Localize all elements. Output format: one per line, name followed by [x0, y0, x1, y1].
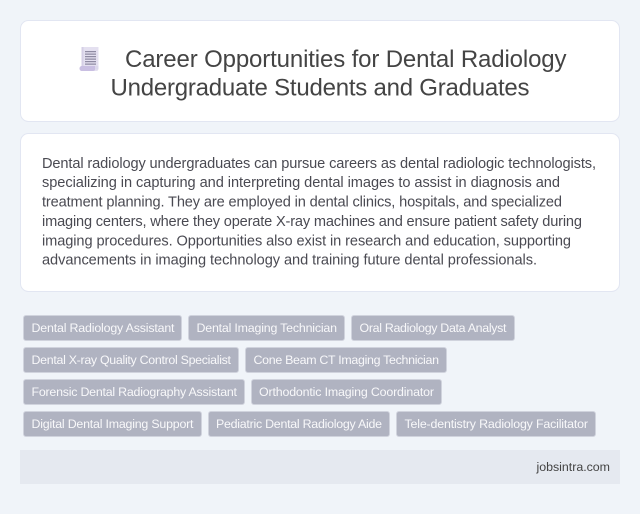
title: Undergraduate Students and Graduates — [110, 74, 530, 102]
panel: description — [20, 134, 620, 292]
panel: header — [20, 20, 620, 122]
tag: Orthodontic Imaging Coordinator — [252, 380, 442, 404]
description text: imaging centers, where they operate X-ray machines and ensure patient safety during — [42, 214, 582, 230]
footer source text: jobsintra.com — [536, 460, 610, 474]
tag: Tele-dentistry Radiology Facilitator — [396, 412, 596, 436]
tag: Pediatric Dental Radiology Aide: Pediatric Dental Radiology Aide — [216, 417, 382, 431]
tag: Digital Dental Imaging Support: Digital Dental Imaging Support — [32, 417, 194, 431]
footer — [20, 450, 620, 484]
description text — [42, 156, 596, 268]
title — [110, 46, 566, 102]
description text: treatment planning. They are employed in dental clinics, hospitals, and specialized — [42, 194, 562, 210]
tag: Dental Imaging Technician: Dental Imaging Technician — [196, 321, 337, 335]
tag list — [24, 316, 596, 436]
icon: document scroll — [80, 47, 98, 71]
tag: Tele-dentistry Radiology Facilitator: Tele-dentistry Radiology Facilitator — [404, 417, 588, 431]
tag: Dental Radiology Assistant — [24, 316, 182, 340]
tag: Dental X-ray Quality Control Specialist: Dental X-ray Quality Control Specialist — [32, 353, 232, 367]
description text: specializing in capturing and interpreting dental images to assist in diagnosis and — [42, 175, 560, 191]
tag: Oral Radiology Data Analyst: Oral Radiology Data Analyst — [360, 321, 507, 335]
tag: Pediatric Dental Radiology Aide — [208, 412, 390, 436]
tag: Cone Beam CT Imaging Technician — [246, 348, 446, 372]
tag: Dental Imaging Technician — [188, 316, 344, 340]
description text: advancements in imaging technology and training future dental professionals. — [42, 252, 537, 268]
tag: Oral Radiology Data Analyst — [352, 316, 514, 340]
description text: Dental radiology undergraduates can pursue careers as dental radiologic technologists, — [42, 156, 596, 172]
tag: Dental Radiology Assistant: Dental Radiology Assistant — [32, 321, 175, 335]
tag: Forensic Dental Radiography Assistant: Forensic Dental Radiography Assistant — [32, 385, 238, 399]
tag: Dental X-ray Quality Control Specialist — [24, 348, 238, 372]
tag: Digital Dental Imaging Support — [24, 412, 202, 436]
tag: Orthodontic Imaging Coordinator: Orthodontic Imaging Coordinator — [259, 385, 434, 399]
description text: imaging procedures. Opportunities also exist in research and education, supporting — [42, 234, 571, 250]
title: Career Opportunities for Dental Radiology — [125, 46, 566, 73]
tag: Cone Beam CT Imaging Technician: Cone Beam CT Imaging Technician — [254, 353, 439, 367]
tag: Forensic Dental Radiography Assistant — [24, 380, 244, 404]
